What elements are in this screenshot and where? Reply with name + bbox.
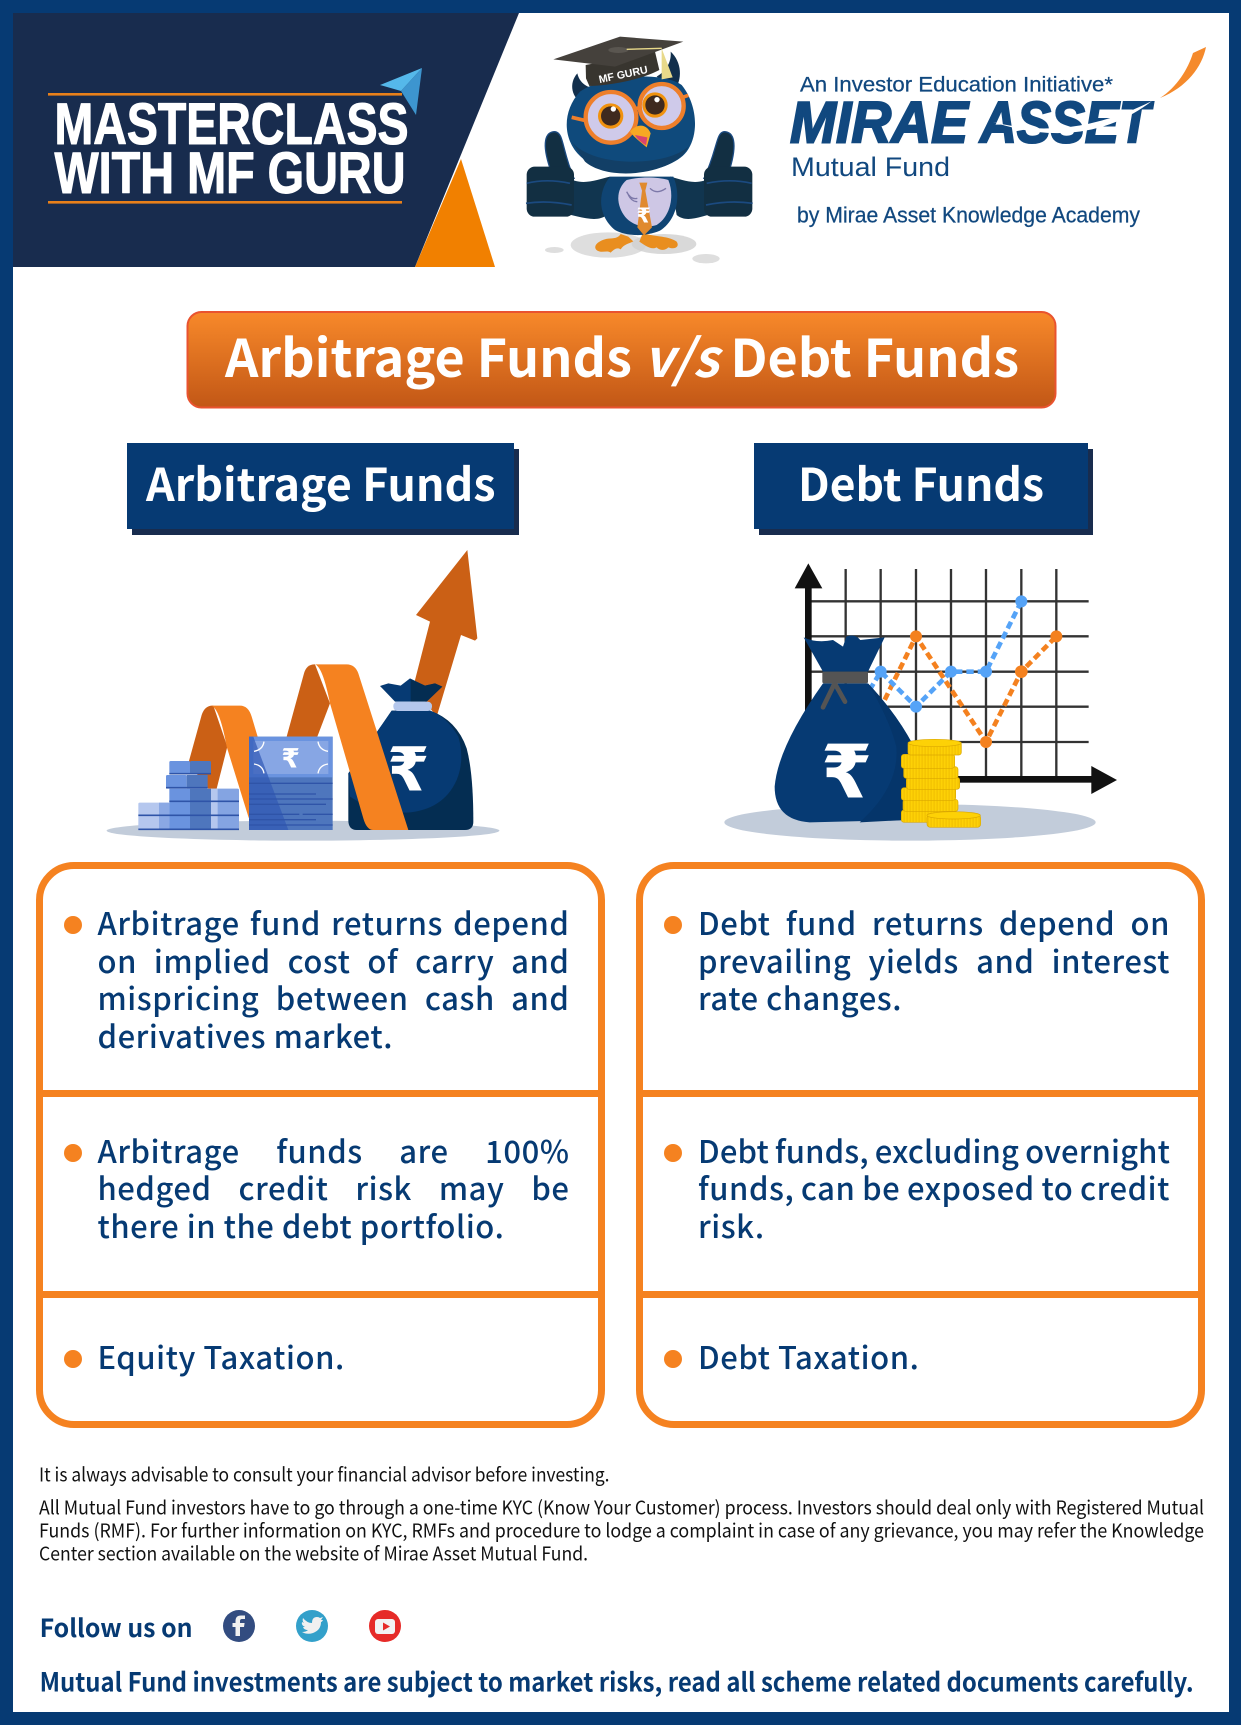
bullet 1: on implied cost of carry and: [98, 937, 570, 982]
bullet 2: [64, 1126, 570, 1247]
chart axes: [795, 563, 1117, 794]
panel: arbitrage funds comparison: [36, 862, 605, 1428]
academy line: by Mirae Asset Knowledge Academy: [797, 203, 1140, 228]
glasses and eyes: [586, 92, 636, 143]
ribbon: [188, 664, 330, 830]
head: [567, 77, 695, 172]
bullet 3: Equity Taxation.: [98, 1332, 345, 1378]
gold coins: [902, 739, 981, 827]
heading: arbitrage funds: Arbitrage Funds: [145, 449, 496, 514]
bullet 1: Arbitrage fund returns depend: [98, 899, 570, 944]
tie: [637, 183, 652, 235]
thumbs: [545, 132, 574, 178]
follow us row with social icons: [40, 1609, 401, 1645]
swoosh: [993, 101, 1152, 133]
bullet 2: hedged credit risk may be: [98, 1164, 570, 1209]
bullet 2: [664, 1126, 1170, 1247]
chest: [618, 178, 671, 227]
wordmark: MIRAE: [790, 91, 970, 156]
Mirae Asset logo block: [790, 47, 1206, 228]
bullet 2: risk.: [698, 1202, 765, 1247]
illustration: arbitrage growth arrow, ribbon, coins, cash and money bag: [106, 550, 500, 841]
mutual fund: Mutual Fund: [791, 152, 950, 182]
icon: twitter: [296, 1610, 328, 1642]
growth arrow: [413, 550, 477, 717]
panel: debt funds comparison: [636, 862, 1205, 1428]
bullet 2: there in the debt portfolio.: [98, 1202, 504, 1247]
beak: [630, 126, 651, 147]
title text: MASTERCLASS: [54, 92, 408, 157]
heading: arbitrage funds: [127, 443, 519, 535]
shadows: [571, 232, 646, 258]
bullet 2: Debt funds, excluding overnight: [698, 1126, 1170, 1172]
money bag: [348, 678, 473, 830]
bullet 1: [64, 899, 570, 1057]
icon: youtube: [369, 1610, 401, 1642]
advisory text block: Center section available on the website of Mirae Asset Mutual Fund.: [39, 1540, 588, 1567]
bullet 1: prevailing yields and interest: [698, 937, 1170, 982]
owl mascot: MF GURU: [598, 64, 649, 86]
heading: debt funds: Debt Funds: [798, 449, 1044, 514]
paper plane: [380, 68, 422, 115]
advisory text block: [39, 1461, 1204, 1567]
header banner with masterclass title: [13, 13, 519, 267]
initiative line: An Investor Education Initiative*: [800, 74, 1113, 97]
money bag: [775, 636, 913, 822]
heading: debt funds: [754, 443, 1093, 535]
cash bundle: [249, 737, 333, 830]
bullet 1: derivatives market.: [98, 1012, 393, 1057]
money bag: ₹: [821, 730, 873, 813]
bullet 2: funds, can be exposed to credit: [698, 1164, 1170, 1209]
owl mascot: ₹: [636, 204, 651, 227]
bullet 1: [664, 899, 1170, 1019]
bullet 1: Debt fund returns depend on: [698, 899, 1170, 944]
bullet 3: Debt Taxation.: [698, 1332, 919, 1378]
body: [601, 177, 677, 235]
front ribbon strip: [315, 664, 408, 830]
title text: WITH MF GURU: [54, 141, 406, 206]
main title banner: Arbitrage Funds v/s Debt Funds: [224, 317, 1019, 392]
blue series: [870, 595, 1028, 713]
bullet 1: mispricing between cash and: [98, 974, 570, 1019]
orange triangle: [415, 159, 495, 267]
wordmark: [790, 91, 1154, 156]
illustration: debt funds chart with money bag and coins: [724, 563, 1117, 841]
money bag: ₹: [387, 736, 429, 804]
cash bundle: ₹: [281, 743, 300, 773]
bullet 1: rate changes.: [698, 974, 902, 1019]
advisory text block: It is always advisable to consult your financial advisor before investing.: [39, 1461, 610, 1488]
owl mascot: [526, 36, 753, 264]
orange series: [880, 630, 1063, 748]
wordmark: ASSET: [978, 91, 1154, 156]
follow us row with social icons: Follow us on: [40, 1609, 193, 1645]
feet: [595, 234, 633, 253]
coin stack: [138, 761, 239, 830]
bullet 2: Arbitrage funds are 100%: [98, 1126, 570, 1172]
fists: [527, 167, 574, 217]
wings: [557, 177, 610, 219]
chart grid: [810, 569, 1089, 780]
title text: [54, 92, 408, 206]
ear tufts: [572, 73, 600, 103]
graduation cap: [586, 52, 659, 86]
icon: facebook: [223, 1610, 255, 1642]
